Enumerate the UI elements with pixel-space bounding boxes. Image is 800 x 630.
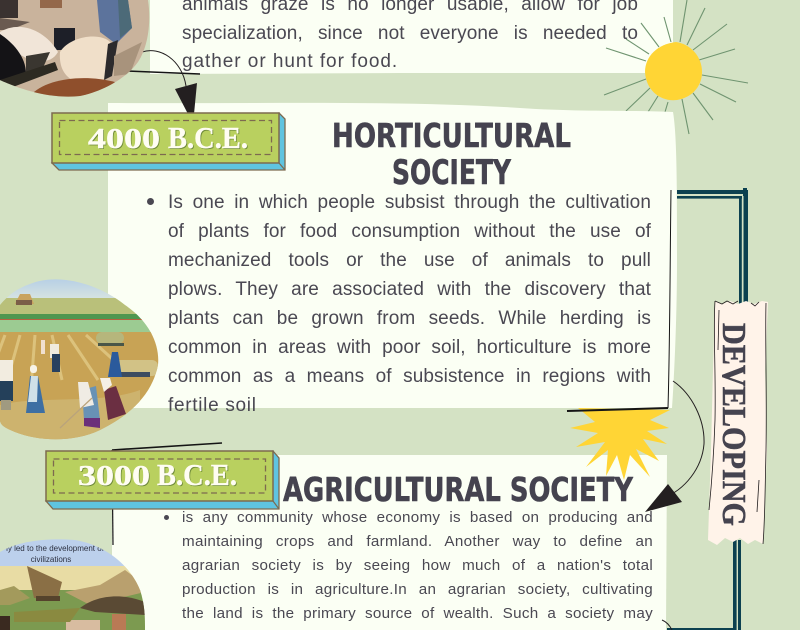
bullet (164, 515, 169, 520)
text: horticultural society paragraph: plants can be grown from seeds. While herding is (168, 308, 651, 329)
text: horticultural society paragraph: plows. They are associated with the discovery that (168, 279, 651, 300)
small curve at bottom right (662, 620, 672, 630)
arrow: from horticultural to agricultural panel (645, 381, 704, 512)
banner: 3000 B.C.E.: B.C.E. (158, 458, 238, 493)
text: horticultural society paragraph: common as a means of subsistence in regions with (168, 366, 651, 387)
text: agricultural society paragraph: is any community whose economy is based on producing and (182, 509, 653, 526)
hand drawn panel outlines (112, 71, 671, 545)
starburst (570, 408, 670, 480)
text: horticultural society paragraph: mechanized tools or the use of animals to pull (168, 250, 651, 271)
text: agricultural society paragraph: the land is the primary source of wealth. Such a society may (182, 605, 653, 622)
text: horticultural society paragraph: common in areas with poor soil, horticulture is more (168, 337, 651, 358)
text: horticultural society paragraph (168, 192, 651, 416)
text: agricultural society paragraph (182, 509, 653, 630)
photo caption text inside agricultural image: ly led to the development of (6, 544, 105, 553)
banner: 3000 B.C.E.: B.C.E. (157, 457, 237, 492)
text: horticultural society paragraph: of plants for food consumption without the use of (168, 221, 651, 242)
icon: sun (604, 0, 748, 134)
text: pastoral society paragraph (182, 0, 638, 72)
banner: 3000 B.C.E.: 3000 (79, 462, 151, 493)
ribbon: developing: DEVELOPING (715, 323, 752, 526)
photo caption text inside agricultural image (6, 545, 104, 562)
banner: 4000 B.C.E.: B.C.E. (168, 120, 248, 155)
panel: pastoral society text (150, 0, 673, 74)
bullet (147, 198, 154, 205)
arrow: from pastoral photo to 4000 B.C.E. (142, 51, 197, 114)
heading: horticultural society: HORTICULTURAL (332, 116, 571, 155)
text: pastoral society paragraph: specialization, since not everyone is needed to (182, 23, 638, 44)
panel: agricultural society (112, 455, 667, 630)
banner: 4000 B.C.E.: 4000 (88, 124, 160, 155)
text: horticultural society paragraph: Is one in which people subsist through the cultivation (168, 192, 651, 213)
photo caption text inside agricultural image: civilizations (31, 555, 71, 564)
banner: 4000 B.C.E.: B.C.E. (169, 121, 249, 156)
heading: horticultural society: SOCIETY (392, 153, 511, 193)
text: agricultural society paragraph: agrarian society is by seeing how much of a nation's total (182, 557, 653, 574)
heading: agricultural society: AGRICULTURAL SOCIETY (283, 470, 634, 509)
panel: horticultural society (108, 103, 677, 408)
text: pastoral society paragraph: gather or hunt for food. (182, 51, 398, 72)
photo: herded animals (0, 0, 158, 630)
text: agricultural society paragraph: maintaining crops and farmland. Another way to define an (182, 533, 653, 550)
text: agricultural society paragraph: production is in agriculture.In an agrarian society, cultivating (182, 581, 653, 598)
connector: bottom right double line (667, 540, 741, 630)
banner: 4000 B.C.E.: 4000 (89, 125, 161, 156)
text: horticultural society paragraph: fertile soil (168, 395, 257, 416)
connector: top right double line (677, 188, 748, 304)
banner: 3000 B.C.E.: 3000 (78, 461, 150, 492)
